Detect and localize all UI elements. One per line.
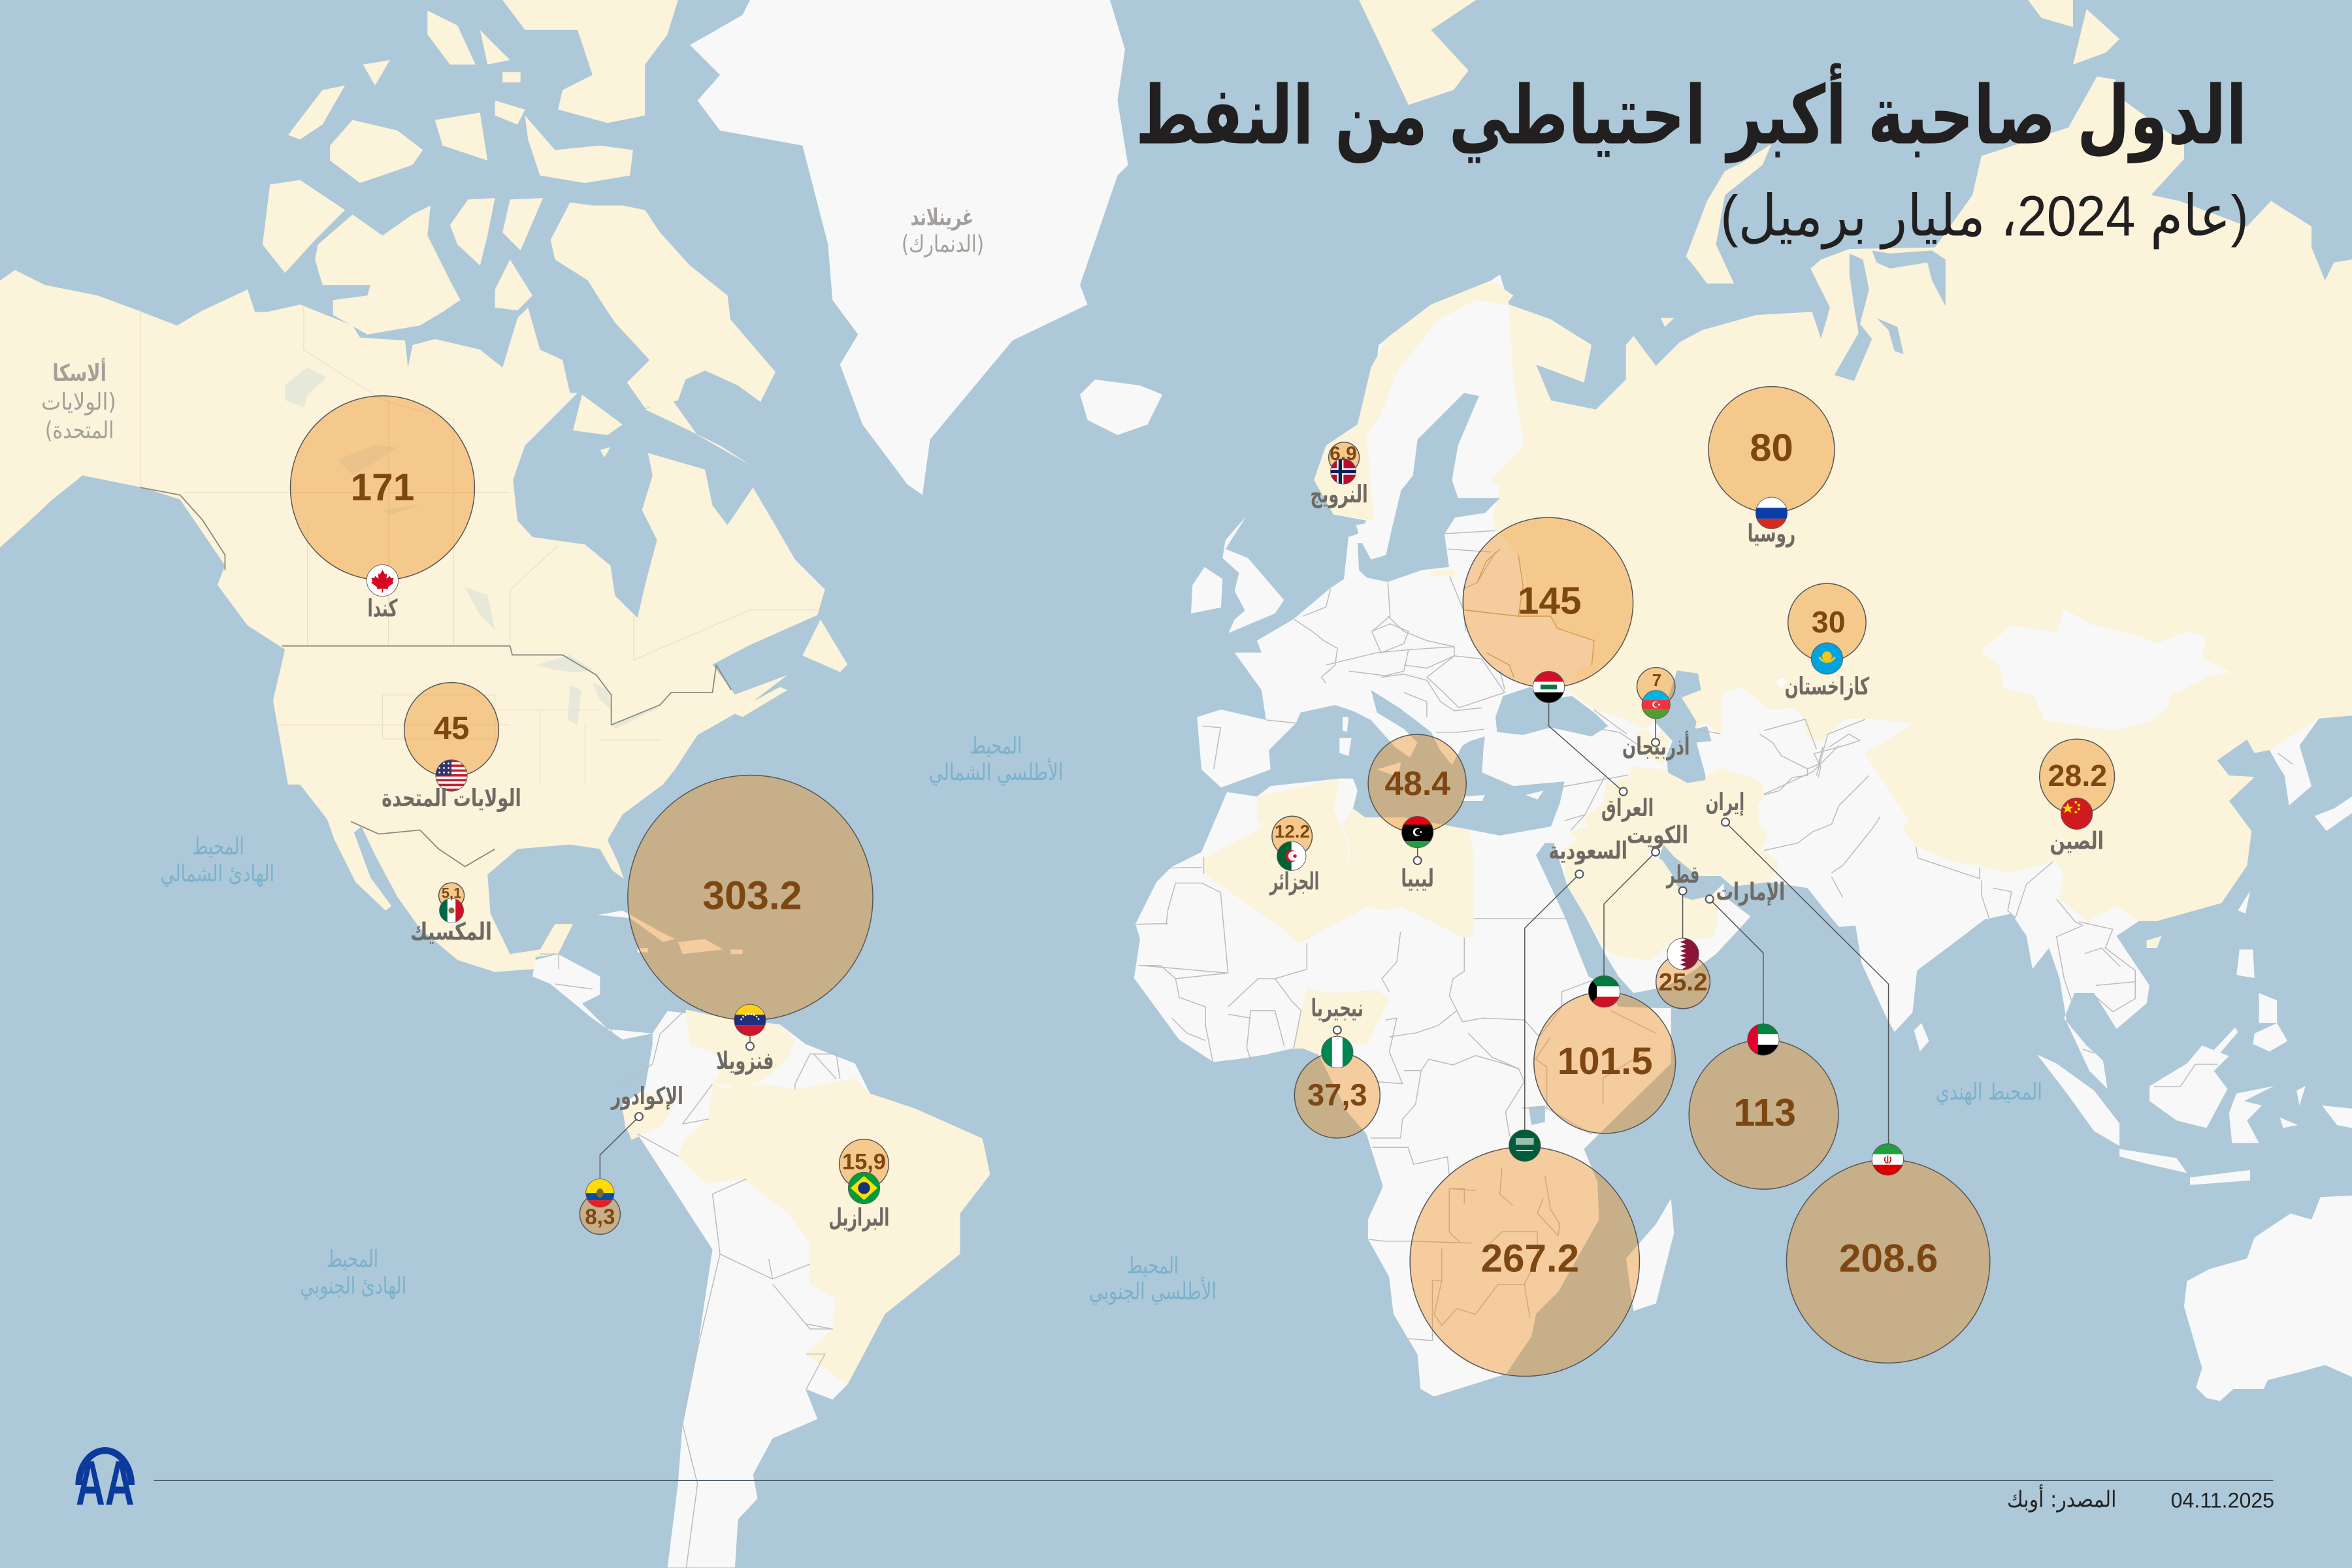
map labels: regions	[41, 204, 2042, 1305]
bubble: Venezuela	[628, 776, 873, 1021]
land: Russian Arctic islands	[1359, 0, 2119, 327]
flag: China	[2060, 797, 2093, 830]
bubble: USA	[404, 683, 498, 777]
label: Canada: كندا	[367, 595, 398, 623]
value: Mexico: 5,1	[442, 885, 461, 902]
value: Nigeria: 37,3	[1307, 1077, 1367, 1112]
label: Libya: ليبيا	[1401, 864, 1434, 892]
flag: Algeria	[1277, 841, 1307, 872]
flag: Iran	[1871, 1143, 1904, 1177]
bubble: Algeria	[1272, 816, 1312, 857]
land: Mongolia	[1980, 609, 2232, 730]
flag: Canada	[366, 564, 399, 597]
country labels	[367, 480, 2104, 1232]
land: Russia, Kazakhstan and China	[1491, 76, 2352, 921]
label: North Atlantic line 1: المحيط	[970, 733, 1022, 760]
label: Saudi Arabia: السعودية	[1548, 836, 1627, 864]
label: North Pacific line 1: المحيط	[192, 834, 244, 860]
subtitle: (عام 2024، مليار برميل)	[1720, 184, 2249, 249]
land: Iceland	[1080, 380, 1162, 435]
bubble: Ecuador	[580, 1194, 620, 1234]
flag: Libya	[1401, 815, 1434, 850]
label: United States part 2: المتحدة)	[45, 417, 114, 444]
label: Greenland: غرينلاند	[911, 204, 973, 231]
land: Kaliningrad	[1431, 570, 1455, 576]
land: Australia	[2184, 1196, 2352, 1401]
value: Ecuador: 8,3	[585, 1205, 615, 1229]
land: Iran	[1629, 766, 1778, 887]
label: Iran: إيران	[1705, 788, 1744, 816]
value: USA: 45	[434, 710, 470, 746]
source: المصدر: أوبك	[2007, 1484, 2117, 1512]
flag: Norway	[1330, 458, 1356, 485]
label: Ecuador: الإكوادور	[610, 1082, 683, 1110]
label: Brazil: البرازيل	[828, 1203, 889, 1232]
borders: Asia	[1764, 719, 2293, 1086]
bubble: Azerbaijan	[1637, 668, 1675, 706]
land: Brazil	[678, 1079, 990, 1384]
land: Ecuador	[623, 1092, 675, 1140]
label: Indian Ocean: المحيط الهندي	[1936, 1079, 2042, 1105]
bubble: China	[2040, 739, 2115, 814]
footer rule	[154, 1480, 2273, 1481]
flag: UAE	[1747, 1023, 1780, 1056]
bubble: Nigeria	[1294, 1053, 1380, 1138]
land: Hainan	[2146, 936, 2161, 948]
flag: Russia	[1755, 497, 1788, 531]
value: Venezuela: 303.2	[702, 873, 802, 917]
value: China: 28.2	[2048, 759, 2107, 792]
flag: Venezuela	[734, 1004, 766, 1037]
label: North Atlantic line 2: الأطلسي الشمالي	[929, 758, 1063, 786]
borders: Central Asia	[1594, 710, 1860, 795]
borders: Europe and Middle East	[1202, 531, 1642, 830]
flag: Saudi Arabia	[1509, 1129, 1541, 1162]
value: Saudi Arabia: 267.2	[1481, 1236, 1579, 1280]
bubble: Mexico	[439, 883, 465, 908]
bubble: Saudi Arabia	[1410, 1147, 1639, 1377]
label: United States part 1: (الولايات	[41, 389, 116, 416]
label: Algeria: الجزائر	[1269, 867, 1319, 895]
land: South America	[623, 1011, 990, 1567]
value: Kazakhstan: 30	[1812, 605, 1846, 639]
label: Alaska: ألاسكا	[52, 357, 106, 387]
land: Central America	[532, 954, 653, 1039]
label: USA: الولايات المتحدة	[382, 784, 521, 812]
land: Norway	[1314, 280, 1514, 521]
leader lines	[600, 702, 1889, 1179]
flag: Nigeria	[1321, 1036, 1354, 1069]
label: South Atlantic line 1: المحيط	[1127, 1252, 1179, 1279]
land: Arabian peninsula producers	[1563, 826, 1723, 960]
flag: Ecuador	[585, 1178, 615, 1209]
label: Kuwait: الكويت	[1627, 821, 1688, 849]
value: Qatar: 25.2	[1659, 968, 1707, 996]
label: Azerbaijan: أذربيجان	[1622, 730, 1690, 760]
bubble: Russia	[1708, 387, 1835, 513]
label: UAE: الإمارات	[1716, 878, 1785, 906]
lakes	[285, 367, 660, 729]
land: Nigeria	[1293, 988, 1389, 1056]
label: South Atlantic line 2: الأطلسي الجنوبي	[1089, 1277, 1217, 1305]
value: Brazil: 15,9	[842, 1149, 886, 1174]
label: Mexico: المكسيك	[410, 917, 492, 945]
flag: Kazakhstan	[1810, 642, 1844, 675]
land: Iraq	[1584, 777, 1658, 853]
borders: North America	[140, 305, 817, 784]
borders: Africa	[1136, 857, 1656, 1341]
logo: Anadolu Agency	[76, 1448, 134, 1518]
label: China: الصين	[2050, 826, 2104, 855]
flag: Mexico	[439, 898, 465, 923]
bubble: Libya	[1368, 734, 1466, 832]
value: Libya: 48.4	[1384, 764, 1450, 802]
land: Algeria	[1203, 779, 1368, 943]
label: Qatar: قطر	[1666, 860, 1699, 889]
land: Venezuela	[685, 1009, 795, 1092]
reserve values	[351, 426, 2107, 1280]
logo: Anadolu Agency: AA	[76, 1448, 134, 1518]
bubble: Iran	[1786, 1160, 1990, 1363]
value: Iran: 208.6	[1839, 1235, 1938, 1280]
value: UAE: 113	[1733, 1090, 1796, 1134]
land: Canadian Arctic islands	[263, 0, 847, 717]
borders: Mexico and South America	[351, 821, 840, 1568]
bubble: Kazakhstan	[1788, 583, 1866, 662]
label: Russia: روسيا	[1748, 519, 1795, 547]
bubble: Brazil	[840, 1139, 889, 1189]
land: Eurasia and Africa	[1134, 76, 2352, 1397]
flag: Iraq	[1532, 670, 1565, 704]
land: Azerbaijan	[1635, 729, 1669, 765]
land: North America	[0, 270, 825, 972]
label: Venezuela: فنزويلا	[716, 1047, 774, 1075]
land: Denmark and Swedish south	[1344, 522, 1392, 585]
land: Mediterranean islands	[1339, 717, 1543, 801]
label: South Pacific line 1: المحيط	[327, 1246, 378, 1273]
bubble: Canada	[290, 396, 474, 580]
leader dots	[635, 678, 1786, 1120]
bubble: Norway	[1329, 442, 1360, 473]
bubble: Kuwait	[1534, 992, 1676, 1134]
flag: USA	[435, 759, 468, 792]
land: East and Southeast Asian islands	[1914, 796, 2352, 1185]
value: Algeria: 12.2	[1275, 821, 1310, 841]
value: Kuwait: 101.5	[1558, 1040, 1653, 1083]
flag: Azerbaijan	[1641, 690, 1671, 720]
flag: Brazil	[847, 1171, 881, 1205]
label: North Pacific line 2: الهادئ الشمالي	[161, 860, 274, 887]
label: Nigeria: نيجيريا	[1311, 994, 1364, 1022]
value: Russia: 80	[1750, 426, 1793, 470]
bubble: Iraq	[1463, 517, 1633, 687]
flag: Qatar	[1667, 938, 1699, 970]
value: Norway: 6.9	[1330, 443, 1357, 465]
land: Madagascar	[1626, 1198, 1674, 1311]
flag: Kuwait	[1588, 975, 1621, 1009]
value: Canada: 171	[351, 466, 414, 509]
date: 04.11.2025	[2171, 1488, 2274, 1512]
reserve bubbles	[290, 387, 2115, 1377]
label: Iraq: العراق	[1601, 794, 1654, 822]
water: inland seas	[1356, 250, 1946, 1125]
land: British Isles	[1191, 516, 1284, 633]
value: Azerbaijan: 7	[1652, 672, 1661, 690]
land: Libya	[1343, 809, 1473, 938]
label: Denmark: (الدنمارك)	[902, 231, 984, 258]
bubble: Qatar	[1656, 955, 1710, 1009]
value: Iraq: 145	[1518, 580, 1582, 623]
bubble: UAE	[1689, 1040, 1838, 1189]
label: South Pacific line 2: الهادئ الجنوبي	[300, 1273, 406, 1299]
land: Caribbean islands	[597, 911, 742, 954]
label: Kazakhstan: كازاخستان	[1785, 672, 1870, 700]
label: Norway: النرويج	[1310, 480, 1368, 508]
land: Greenland	[690, 0, 1128, 495]
